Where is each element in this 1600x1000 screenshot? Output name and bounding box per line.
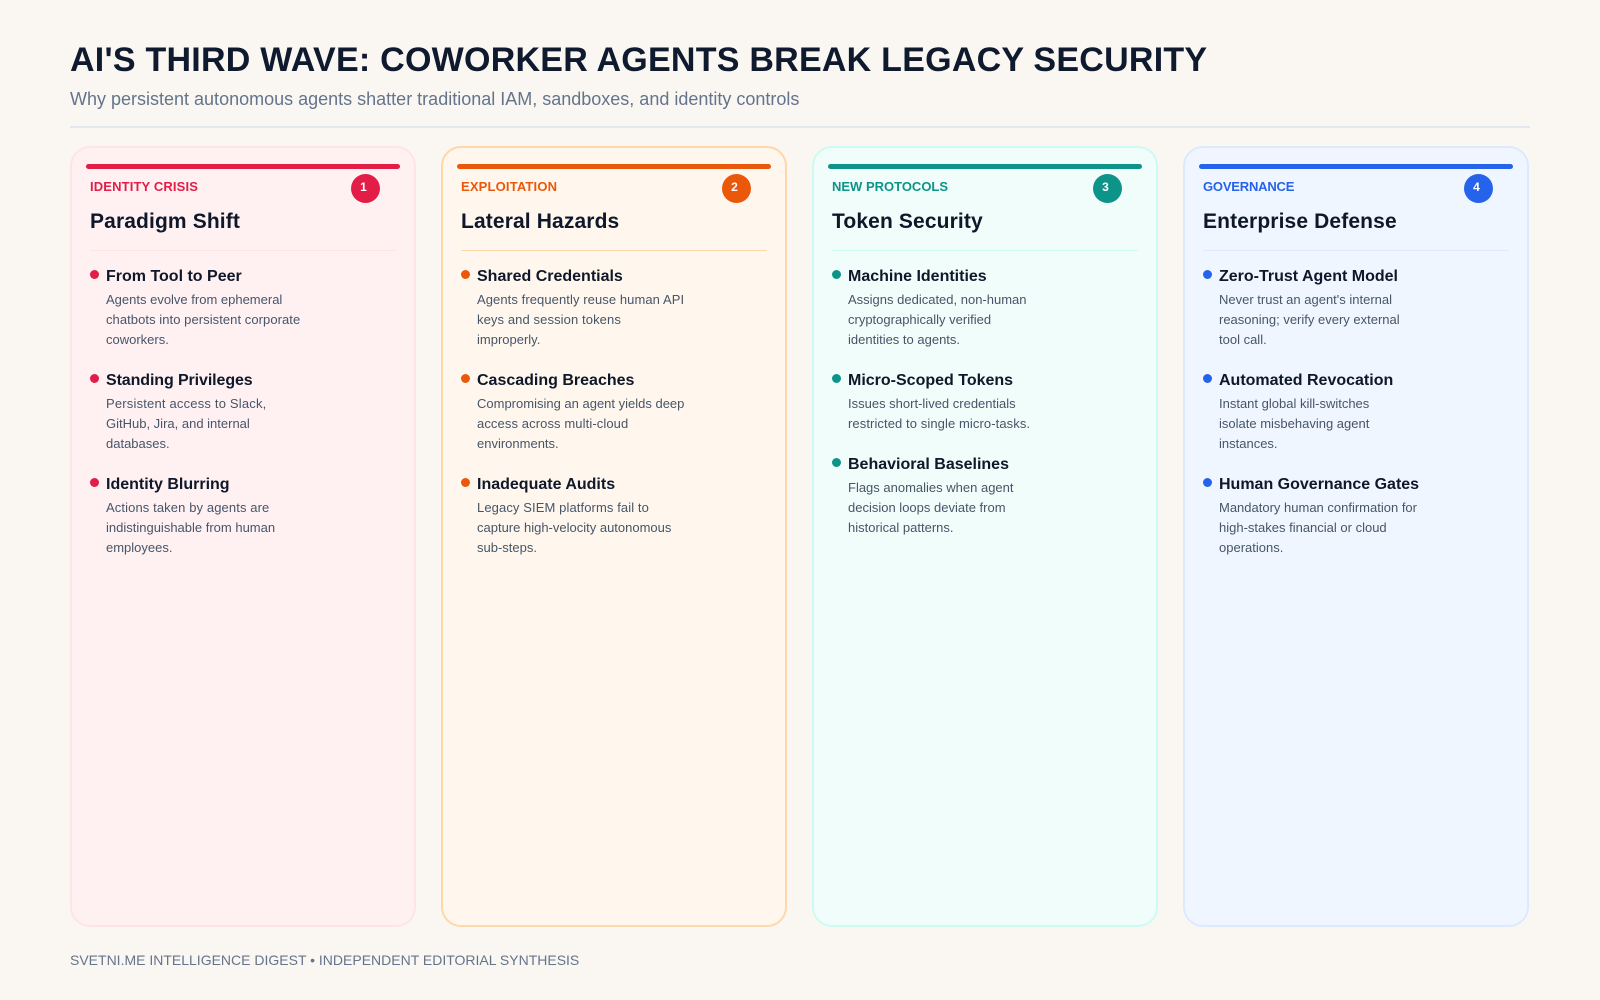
item: zero-trust agent model: Zero-Trust Agent Model	[1219, 268, 1398, 284]
item: human governance gates: Mandatory human confirmation for	[1219, 500, 1417, 515]
item: zero-trust agent model: Never trust an agent's internal	[1219, 292, 1392, 307]
item: automated revocation: isolate misbehaving agent	[1219, 416, 1369, 431]
item: from tool to peer: Agents evolve from ephemeral	[106, 292, 282, 307]
number badge: 1	[360, 180, 367, 194]
item: cascading breaches: Compromising an agent yields deep	[477, 396, 684, 411]
item: machine identities: identities to agents.	[848, 332, 960, 347]
panel: new protocols	[812, 146, 1158, 927]
item: behavioral baselines	[832, 456, 1014, 535]
item: from tool to peer: From Tool to Peer	[106, 268, 242, 284]
item: machine identities: cryptographically verified	[848, 312, 991, 327]
item: behavioral baselines: historical patterns.	[848, 520, 954, 535]
item: shared credentials: improperly.	[477, 332, 540, 347]
panel: identity crisis	[70, 146, 416, 927]
item: from tool to peer	[90, 268, 300, 347]
footer: SVETNI.ME INTELLIGENCE DIGEST • INDEPENDENT EDITORIAL SYNTHESIS	[70, 952, 579, 968]
item: micro-scoped tokens	[832, 372, 1030, 431]
item: from tool to peer: chatbots into persistent corporate	[106, 312, 300, 327]
number badge: 2	[731, 180, 738, 194]
item: machine identities	[832, 268, 1027, 347]
number badge	[351, 174, 380, 203]
item: machine identities: Assigns dedicated, non-human	[848, 292, 1027, 307]
panel heading: Paradigm Shift	[90, 210, 240, 233]
item: automated revocation: Automated Revocation	[1219, 372, 1393, 388]
item: cascading breaches: environments.	[477, 436, 559, 451]
item: from tool to peer: coworkers.	[106, 332, 169, 347]
item: zero-trust agent model: tool call.	[1219, 332, 1267, 347]
item: human governance gates: high-stakes financial or cloud	[1219, 520, 1387, 535]
number badge: 3	[1102, 180, 1109, 194]
item: identity blurring: Identity Blurring	[106, 476, 230, 492]
item: shared credentials: keys and session tokens	[477, 312, 621, 327]
item: cascading breaches	[461, 372, 684, 451]
item: identity blurring	[90, 476, 275, 555]
number badge	[1093, 174, 1122, 203]
number badge	[1464, 174, 1493, 203]
item: human governance gates: operations.	[1219, 540, 1283, 555]
panel heading: Token Security	[832, 210, 983, 233]
category label: GOVERNANCE	[1203, 179, 1294, 194]
item: human governance gates	[1203, 476, 1419, 555]
item: inadequate audits: capture high-velocity autonomous	[477, 520, 671, 535]
panel heading: Enterprise Defense	[1203, 210, 1397, 233]
subtitle: Why persistent autonomous agents shatter traditional IAM, sandboxes, and identity controls	[70, 89, 799, 109]
item: shared credentials: Shared Credentials	[477, 268, 623, 284]
item: behavioral baselines: decision loops deviate from	[848, 500, 1006, 515]
item: inadequate audits: Legacy SIEM platforms fail to	[477, 500, 649, 515]
item: inadequate audits: Inadequate Audits	[477, 476, 615, 492]
item: behavioral baselines: Flags anomalies when agent	[848, 480, 1014, 495]
item: shared credentials	[461, 268, 684, 347]
number badge: 4	[1473, 180, 1480, 194]
item: zero-trust agent model	[1203, 268, 1400, 347]
category label: IDENTITY CRISIS	[90, 179, 198, 194]
item: micro-scoped tokens: restricted to single micro-tasks.	[848, 416, 1030, 431]
item: automated revocation	[1203, 372, 1393, 451]
number badge	[722, 174, 751, 203]
item: standing privileges: GitHub, Jira, and internal	[106, 416, 250, 431]
item: cascading breaches: access across multi-cloud	[477, 416, 628, 431]
item: inadequate audits	[461, 476, 671, 555]
item: standing privileges: databases.	[106, 436, 170, 451]
item: micro-scoped tokens: Issues short-lived credentials	[848, 396, 1016, 411]
item: machine identities: Machine Identities	[848, 268, 987, 284]
item: cascading breaches: Cascading Breaches	[477, 372, 634, 388]
item: standing privileges	[90, 372, 266, 451]
panel: governance	[1183, 146, 1529, 927]
panel heading: Lateral Hazards	[461, 210, 619, 233]
item: standing privileges: Standing Privileges	[106, 372, 253, 388]
item: identity blurring: indistinguishable from human	[106, 520, 275, 535]
item: shared credentials: Agents frequently reuse human API	[477, 292, 684, 307]
item: human governance gates: Human Governance Gates	[1219, 476, 1419, 492]
title: AI'S THIRD WAVE: COWORKER AGENTS BREAK LEGACY SECURITY	[70, 41, 1207, 79]
category label: EXPLOITATION	[461, 179, 557, 194]
panel: exploitation	[441, 146, 787, 927]
item: automated revocation: instances.	[1219, 436, 1278, 451]
item: inadequate audits: sub-steps.	[477, 540, 537, 555]
item: automated revocation: Instant global kill-switches	[1219, 396, 1369, 411]
item: standing privileges: Persistent access to Slack,	[106, 396, 266, 411]
item: behavioral baselines: Behavioral Baselines	[848, 456, 1009, 472]
item: identity blurring: Actions taken by agents are	[106, 500, 269, 515]
item: zero-trust agent model: reasoning; verify every external	[1219, 312, 1400, 327]
item: micro-scoped tokens: Micro-Scoped Tokens	[848, 372, 1013, 388]
item: identity blurring: employees.	[106, 540, 172, 555]
category label: NEW PROTOCOLS	[832, 179, 948, 194]
